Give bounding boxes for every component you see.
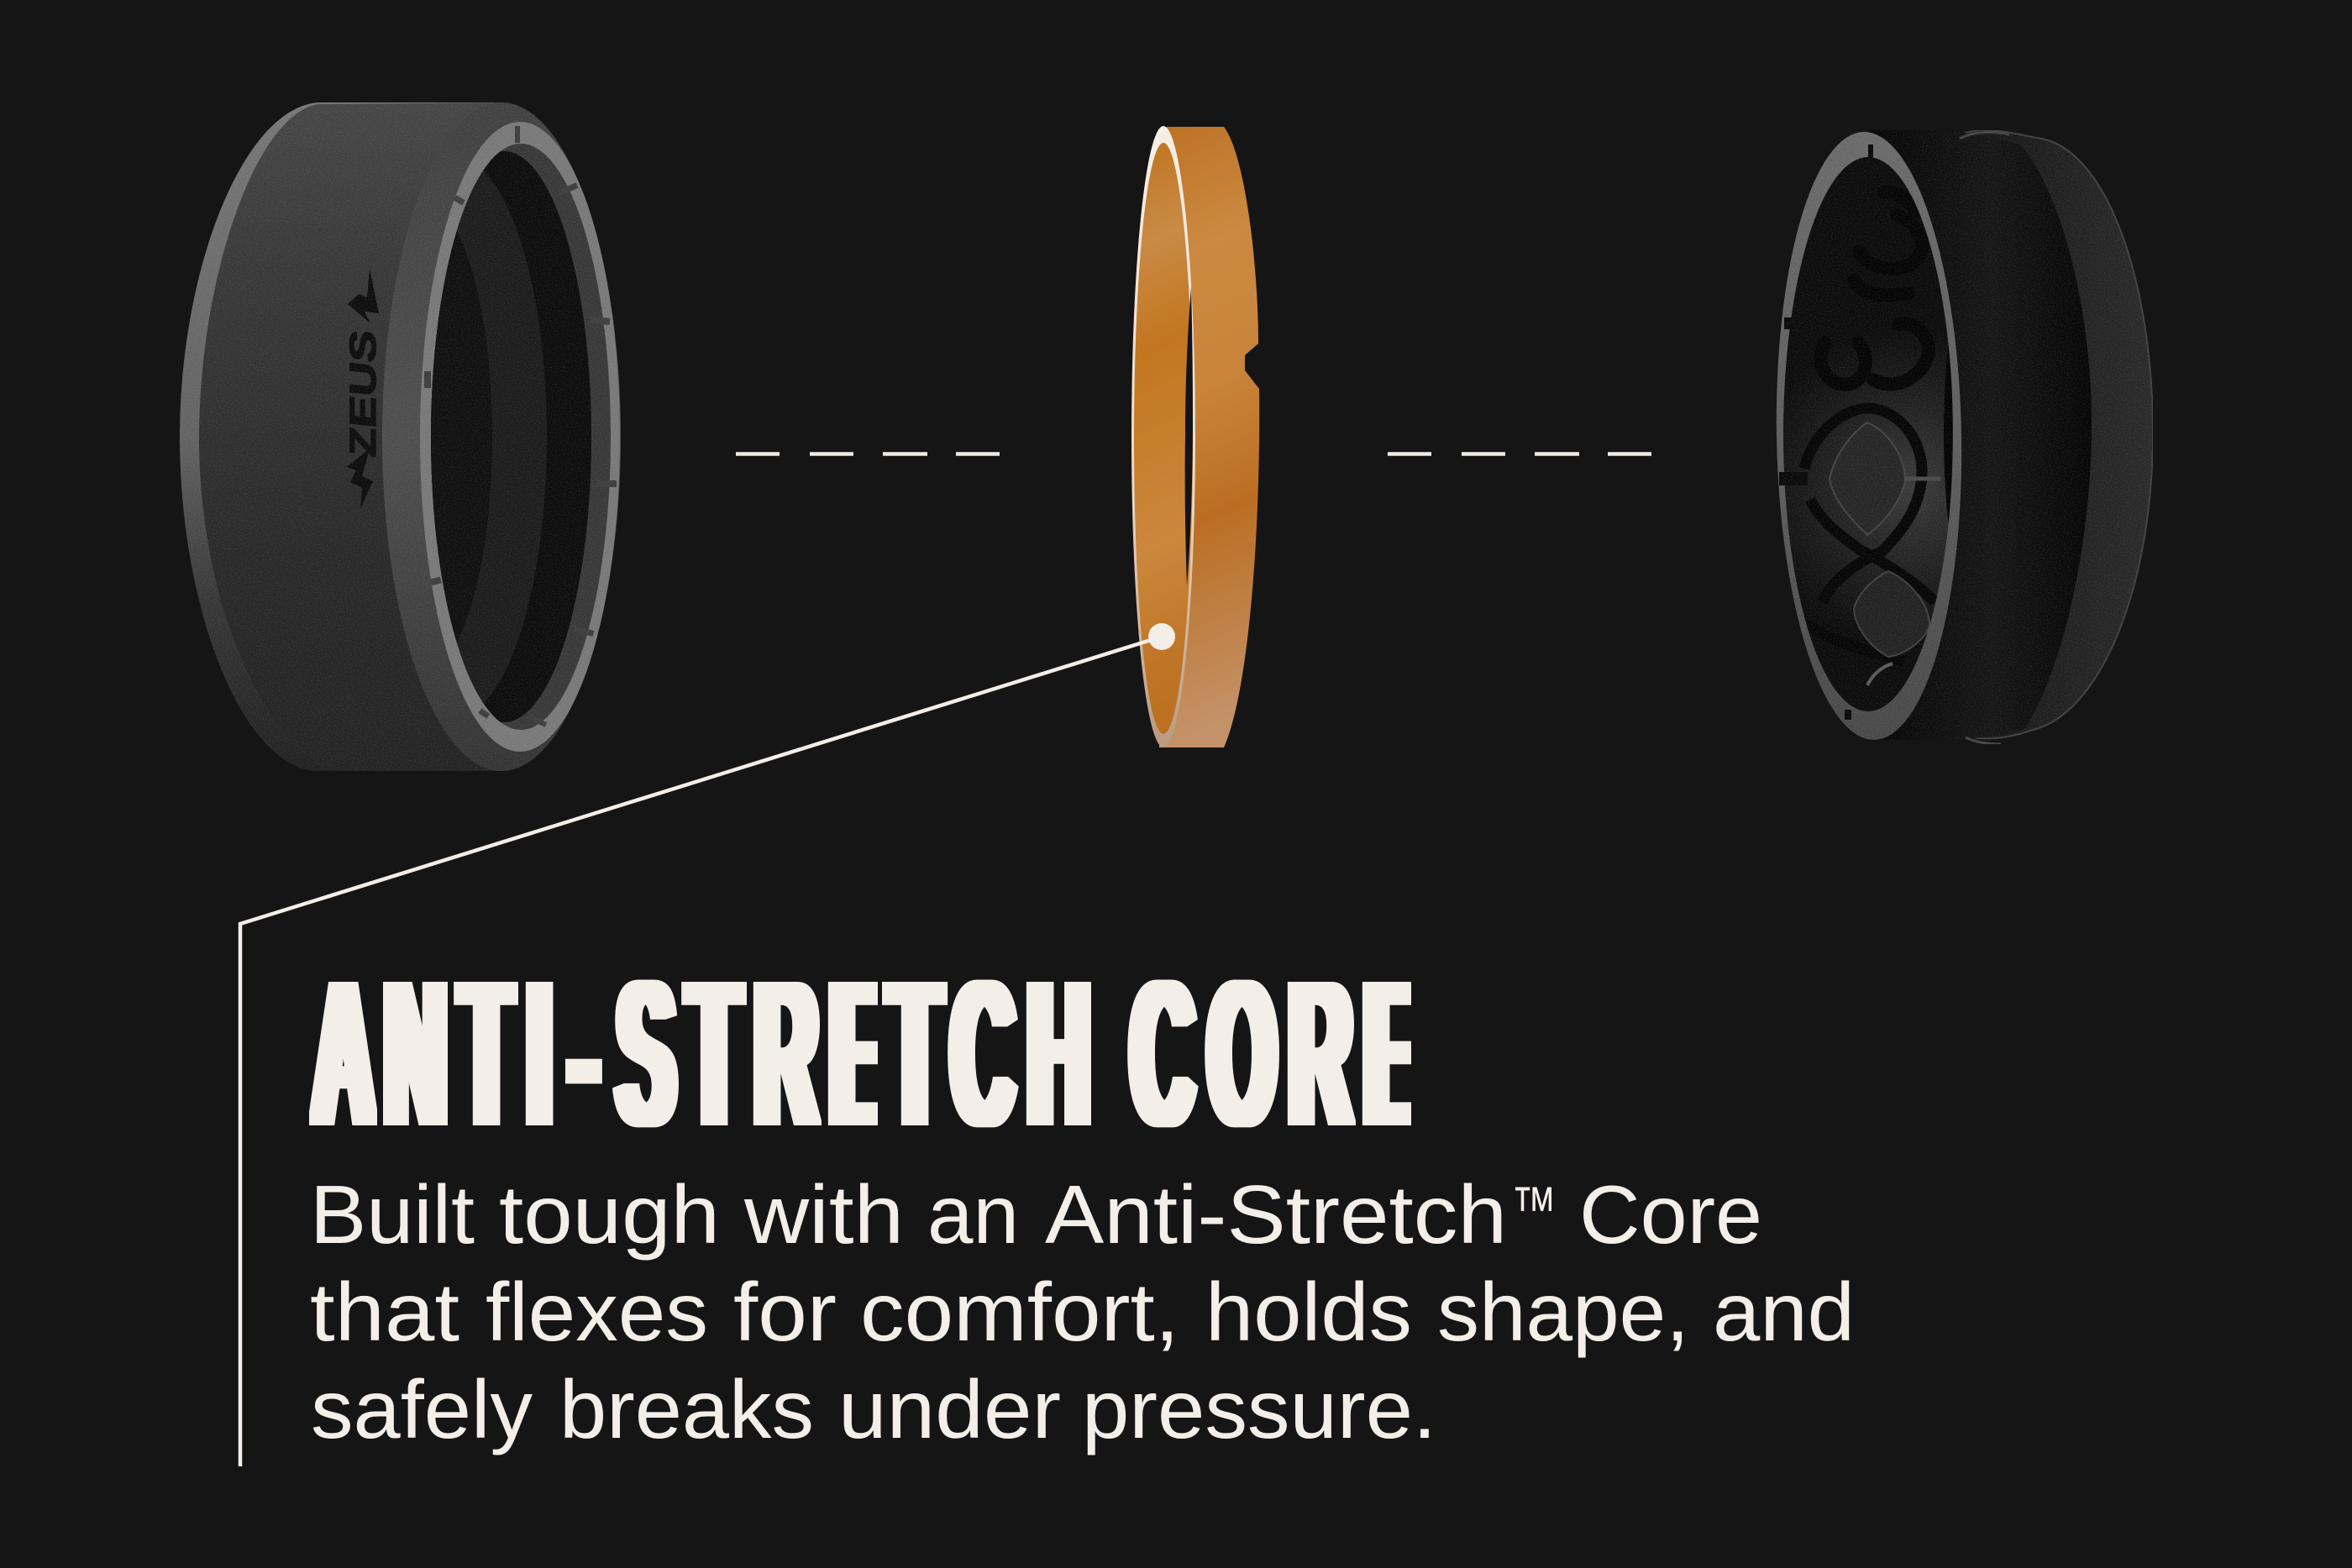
centre ring: orange anti-stretch core — [1131, 126, 1259, 747]
core opening — [1185, 286, 1193, 585]
engraved diamond one — [1830, 422, 1905, 535]
callout leader line and dot — [240, 623, 1175, 1466]
engraved infinity pattern — [1804, 408, 1935, 661]
liner interior with engraved pattern — [1783, 157, 1953, 711]
dashed connector: left ring to core — [736, 452, 1000, 456]
Zeus logo — [343, 269, 384, 509]
body text: shape, — [1437, 1266, 1689, 1358]
ring interior — [431, 144, 611, 730]
ring outer body — [199, 102, 504, 771]
body text: ™ — [1511, 1173, 1557, 1244]
liner middle section — [1869, 130, 2092, 740]
body text: Core — [1579, 1168, 1762, 1261]
body text: an — [927, 1168, 1019, 1261]
ring front rim — [420, 122, 620, 752]
body text: and — [1713, 1266, 1855, 1358]
liner back section — [1966, 130, 2153, 738]
rim notches — [424, 126, 617, 727]
body text — [310, 1156, 1855, 1455]
body text: comfort, — [860, 1266, 1179, 1358]
body text: under — [838, 1363, 1061, 1455]
body text: that — [310, 1266, 459, 1358]
body text: breaks — [559, 1363, 814, 1455]
left ring: outer band with Zeus logo — [180, 102, 622, 771]
ring front bevel — [382, 102, 621, 771]
body text: Anti-Stretch — [1045, 1168, 1507, 1261]
body text: pressure. — [1082, 1363, 1436, 1455]
infographic canvas — [180, 102, 2153, 1466]
body text: with — [743, 1168, 904, 1261]
liner top and bottom edge highlights — [1960, 132, 2009, 744]
right ring: black inner liner — [1772, 130, 2153, 744]
body text: for — [733, 1266, 837, 1358]
interior dark lens — [1944, 343, 1952, 527]
title: ANTI-STRETCH CORE — [312, 937, 1421, 1171]
core outer band with notch — [1159, 127, 1259, 747]
body text: Built — [310, 1168, 475, 1261]
ring back bevel — [180, 102, 504, 771]
Zeus logo: ZEUS — [343, 328, 384, 459]
body text: flexes — [486, 1266, 708, 1358]
dashed connector: core to right ring — [1388, 452, 1651, 456]
engraved script mark — [1820, 192, 1929, 385]
engraved spokes — [1905, 477, 1940, 480]
liner rim notches — [1779, 144, 1873, 720]
body text: tough — [499, 1168, 720, 1261]
liner front rim — [1772, 130, 1966, 742]
core front edge — [1131, 126, 1195, 747]
engraved diamond two — [1854, 571, 1929, 657]
body text: holds — [1205, 1266, 1412, 1358]
body text: safely — [311, 1363, 533, 1455]
core interior — [1134, 143, 1193, 734]
